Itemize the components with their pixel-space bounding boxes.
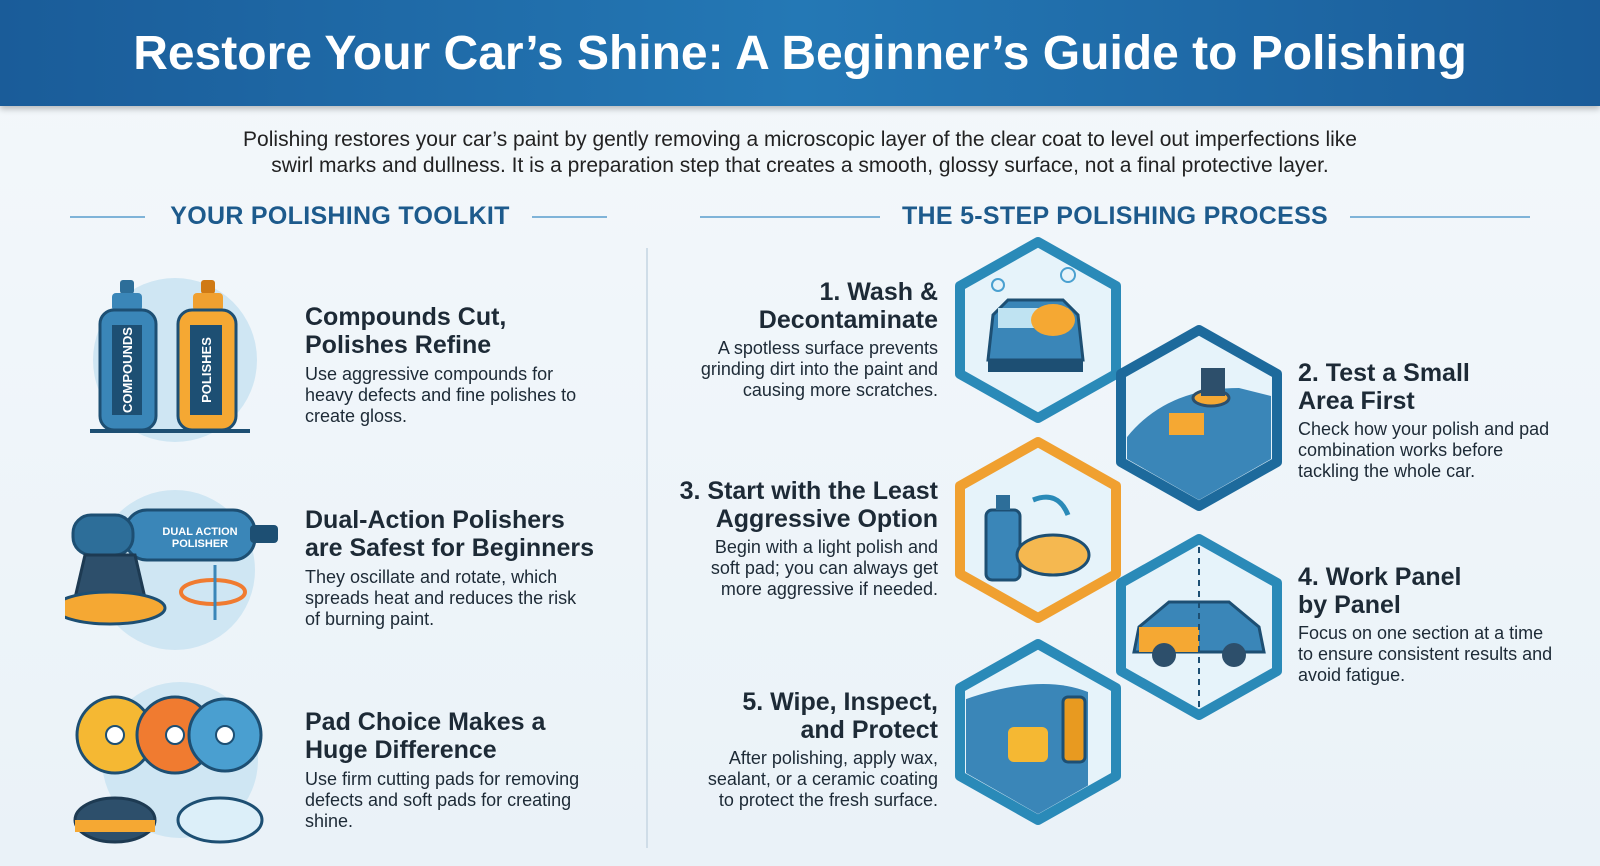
step 2 text: Check how your polish and pad combination works before tackling the whole car.	[1298, 419, 1549, 481]
step 2 text	[1298, 359, 1549, 481]
step 3 text	[680, 477, 938, 599]
step 5 text: and Protect	[800, 716, 938, 744]
step 4 text: 4. Work Panel	[1298, 563, 1462, 591]
icon: DA polisher	[65, 490, 278, 650]
icon: step 4 panel	[1121, 539, 1277, 715]
icon: step 2 test	[1119, 330, 1279, 508]
text: pads: Huge Difference	[305, 736, 497, 764]
icon: step 3 least aggressive	[960, 442, 1116, 618]
icon: DA polisher: DUAL ACTION	[162, 526, 238, 538]
intro text: Polishing restores your car’s paint by gently removing a microscopic layer of the clear coat to level out imperfections like	[243, 128, 1357, 151]
text: compounds	[305, 303, 576, 426]
text: DA	[305, 506, 594, 629]
icon: bottles: POLISHES	[199, 337, 214, 403]
text: pads	[305, 708, 579, 831]
icon: bottles	[90, 278, 257, 442]
icon: pads	[74, 682, 264, 844]
text: DA: They oscillate and rotate, which spreads heat and reduces the risk of burning paint.	[305, 567, 576, 629]
step 5 text: 5. Wipe, Inspect,	[742, 688, 938, 716]
text: pads: Pad Choice Makes a	[305, 708, 545, 736]
step 2 text: 2. Test a Small	[1298, 359, 1470, 387]
step 1 text	[701, 278, 938, 400]
step 4 text: by Panel	[1298, 591, 1401, 619]
icon: step 1 wash	[960, 242, 1116, 418]
step 4 text	[1298, 563, 1552, 685]
title: Restore Your Car’s Shine: A Beginner’s Guide to Polishing	[133, 27, 1467, 80]
text: DA: Dual-Action Polishers	[305, 506, 565, 534]
step 1 text: Decontaminate	[759, 306, 938, 334]
step 5 text	[708, 688, 938, 810]
icon: step 5 wipe	[958, 644, 1116, 822]
title bar	[0, 0, 1600, 106]
text: DA: are Safest for Beginners	[305, 534, 594, 562]
icon: DA polisher: POLISHER	[172, 538, 228, 550]
text: compounds: Use aggressive compounds for heavy defects and fine polishes to create gloss.	[305, 364, 576, 426]
step 1 text: A spotless surface prevents grinding dirt into the paint and causing more scratches.	[701, 338, 938, 400]
heading: toolkit: YOUR POLISHING TOOLKIT	[170, 202, 510, 230]
step 4 text: Focus on one section at a time to ensure consistent results and avoid fatigue.	[1298, 623, 1552, 685]
hexagons	[955, 237, 1282, 825]
step 2 text: Area First	[1298, 387, 1415, 415]
text: compounds: Compounds Cut,	[305, 303, 506, 331]
intro text	[243, 128, 1357, 177]
step 3 text: Begin with a light polish and soft pad; you can always get more aggressive if needed.	[711, 537, 938, 599]
icon: bottles: COMPOUNDS	[120, 327, 135, 413]
step 3 text: 3. Start with the Least	[680, 477, 938, 505]
step 3 text: Aggressive Option	[716, 505, 938, 533]
step 1 text: 1. Wash &	[819, 278, 938, 306]
intro text: swirl marks and dullness. It is a preparation step that creates a smooth, glossy surface, not a final protective layer.	[271, 154, 1329, 177]
heading: process: THE 5-STEP POLISHING PROCESS	[902, 202, 1328, 230]
text: pads: Use firm cutting pads for removing defects and soft pads for creating shine.	[305, 769, 579, 831]
step 5 text: After polishing, apply wax, sealant, or a ceramic coating to protect the fresh surface.	[708, 748, 938, 810]
text: compounds: Polishes Refine	[305, 331, 491, 359]
